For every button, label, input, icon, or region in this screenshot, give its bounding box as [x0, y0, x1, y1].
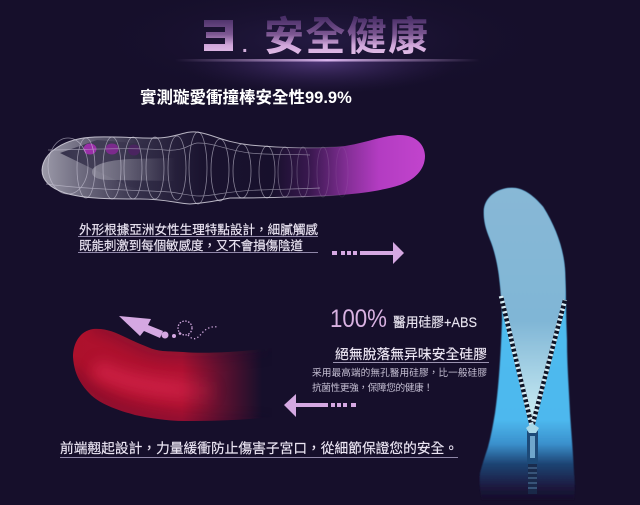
- red tip product: [73, 328, 258, 421]
- open inner blue: [484, 188, 565, 427]
- wireframe rings: [46, 132, 348, 204]
- bottom description: 前端翹起設計，力量緩衝防止傷害子宮口，從細節保證您的安全。: [60, 440, 458, 456]
- title: .: [242, 35, 248, 57]
- silicone description: 采用最高端的無孔醫用硅膠，比一般硅膠: [312, 366, 487, 379]
- silicone description: [312, 366, 487, 394]
- percentage label: 100%: [330, 305, 387, 333]
- silicone safety heading: 絕無脫落無异味安全硅膠: [335, 347, 487, 362]
- description: shape design: 外形根據亞洲女性生理特點設計，細膩觸感: [79, 222, 318, 237]
- description: shape design: 既能刺激到每個敏感度，又不會損傷陰道: [79, 238, 303, 253]
- inner motor shapes: [60, 140, 175, 195]
- title: 安全健康: [264, 15, 428, 59]
- purple product wireframe: [42, 132, 425, 204]
- arrow: tip direction: [119, 316, 217, 339]
- outer blue body: [480, 188, 575, 500]
- zipper slider: [526, 423, 539, 494]
- description: shape design: [78, 222, 318, 253]
- zipper teeth: [501, 296, 565, 427]
- subtitle: 實測璇愛衝撞棒安全性99.9%: [140, 87, 352, 107]
- percentage label: [330, 305, 477, 333]
- title underline: [175, 59, 480, 95]
- silicone description: 抗菌性更強，保障您的健康！: [312, 381, 433, 394]
- arrow: right: [332, 242, 404, 264]
- title glow: [90, 0, 550, 100]
- blue zipper product: [480, 188, 575, 500]
- percentage label: 醫用硅膠+ABS: [393, 315, 477, 330]
- arrow: left: [284, 394, 356, 417]
